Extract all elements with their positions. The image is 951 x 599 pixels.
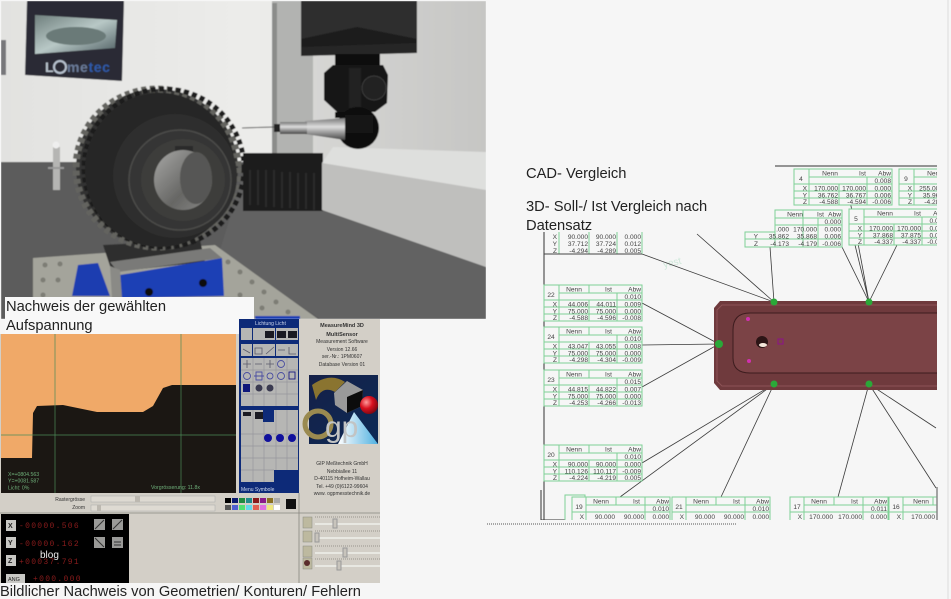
OGP logo: gp [325,411,358,444]
table 19: X [580,514,585,521]
table 21: 90.000 [695,514,715,521]
table 21: 0.000 [752,514,769,521]
table 5: 0.000 [929,226,946,232]
table 23: -4.266 [597,400,616,407]
radiator [243,153,323,211]
slider row: Zoom [72,505,85,511]
table 20: Abw [628,446,641,454]
table 24: 0.008 [624,344,641,350]
poster: L [45,59,54,75]
about text block: Database Version 01 [319,362,365,368]
table 23: -0.013 [622,400,641,407]
table 22: 75.000 [568,308,588,316]
table 19: Abw [656,498,669,506]
about text block: Version 12.66 [327,347,358,353]
table 20: Nenn [566,446,582,454]
table 19: Nenn [593,498,609,506]
table top middle [745,210,842,248]
table 5: 5 [854,216,858,223]
table 17: 170.000 [838,514,862,521]
table 22: Abw [628,286,641,294]
panel: photo of gear on measuring machine [1,1,486,319]
table 22: 75.000 [596,308,616,316]
table 20: 110.126 [565,468,588,476]
table 4: 36.767 [846,192,866,200]
table 20: X [553,462,558,468]
table 9: X [908,186,913,192]
table top middle: -4.173 [770,241,789,248]
table: top left partial: 0.012 [624,241,641,248]
table 24: Z [553,357,557,364]
table 23: 0.015 [624,379,641,386]
coordinate readout: ANG [8,577,20,583]
blue clamp fixture [72,240,300,319]
table top middle: Z [754,241,758,248]
tool palette [239,319,299,493]
table top middle: .000 [776,226,789,234]
table 5: -4.337 [902,239,921,246]
table 20: 90.000 [596,462,616,468]
table 22: Z [553,315,557,322]
table 23: 75.000 [568,394,588,400]
table 5: Nenn [877,210,893,218]
table 24: Ist [605,328,612,336]
caption: Aufspannung: Aufspannung [6,318,93,334]
table 21: Nenn [693,498,709,506]
caption: Aufspannung [5,297,254,334]
table top middle: 35.868 [797,234,817,240]
table: top left partial: Z [553,248,557,255]
table 23: -4.253 [569,400,588,407]
tool palette: Menu Symbole [241,487,275,493]
table 24: 43.055 [596,344,616,350]
table 9: Y [908,192,913,200]
slider row: Rastergrösse [55,497,85,503]
table 5 [849,209,947,246]
table 23: 0.007 [624,386,641,394]
table 19: 19 [575,504,583,511]
table 5: -4.337 [874,239,893,246]
panel: CAD comparison [541,166,951,533]
table 23: Nenn [566,372,582,378]
coordinate readout: -00000.162 [19,540,80,549]
table: top left partial: -4.289 [597,248,616,255]
about text block: Tel. +49 (0)6122-99604 [316,484,368,490]
table 5: X [858,226,863,232]
colour swatches [225,498,296,510]
table 21: X [680,514,685,521]
OGP logo [305,375,378,444]
table 24: 75.000 [596,350,616,358]
table 23: Y [553,394,558,400]
table 20: 110.117 [593,468,616,476]
table 24: Y [553,350,558,358]
slider row [55,496,215,511]
about text block: ser.-Nr.: 1PM0607 [322,354,362,360]
table 20: -0.009 [622,468,641,476]
table 4: Ist [859,170,866,178]
table 5: 0.006 [929,232,946,240]
table 24: -4.304 [597,357,616,364]
table 24: 24 [547,334,555,341]
text block: 3D comparison: 3D- Soll-/ Ist Vergleich nach [526,199,707,215]
about text block: MultiSensor [326,332,359,338]
table 24: Nenn [566,328,582,336]
table 22: 44.011 [596,302,616,308]
table 9: -4.283 [924,199,943,206]
about text block: GIP Meßtechnik GmbH [316,461,368,467]
table top middle: 35.862 [769,234,789,240]
table 20: Ist [605,446,612,454]
text block: 3D comparison [526,199,707,234]
table: top left partial: -4.294 [569,248,588,255]
table 22: -4.596 [597,315,616,322]
table 17: Nenn [811,498,827,506]
table 4: Nenn [822,170,838,178]
table top middle: 0.000 [824,219,841,226]
table 24: X [553,344,558,350]
calibration pin [48,142,64,190]
table 23: 75.000 [596,394,616,400]
camera view: Vorgrösserung: 11.8x [151,485,200,491]
table top middle: -0.006 [822,241,841,248]
table 5: Z [858,239,862,246]
table 20: Z [553,475,557,482]
table 22: Nenn [566,286,582,294]
camera view [1,334,236,493]
about text block: Nebbiallee 11 [327,469,357,475]
table 4: Z [803,199,807,206]
table 21: Ist [733,498,740,506]
table 21: Abw [756,498,769,506]
table 23: X [553,386,558,394]
coordinate readout [1,514,129,584]
camera view: Y=+0081.587 [8,478,39,484]
table 4: 0.006 [874,192,891,200]
caption: Aufspannung: Nachweis der gewählten [6,299,166,315]
table 20: -4.219 [597,475,616,482]
table 20: 0.000 [624,462,641,468]
table 4: -0.006 [872,199,891,206]
table 4: X [803,186,808,192]
table 19: Ist [633,498,640,506]
table 9: Z [908,199,912,206]
table 20 [544,445,642,482]
about text block: MeasureMind 3D [320,323,364,329]
table top middle: Nenn [787,212,803,218]
table 23: Ist [605,372,612,378]
table 16: X [897,514,902,521]
table 5: 170.000 [897,226,921,232]
table 20: 0.005 [624,475,641,482]
table 21: 0.010 [752,506,769,513]
text block: 3D comparison: Datensatz [526,218,592,234]
coordinate readout: Z [8,558,13,565]
table 23: Abw [628,372,641,378]
table: top left partial: 37.724 [596,241,616,248]
table 4: Y [803,192,808,200]
table 4 [794,169,892,206]
leader lines [620,190,936,497]
table 21: 90.000 [724,514,744,521]
table 4: 0.008 [874,178,891,185]
table top middle: Y [754,234,759,240]
watermark: yest [662,256,683,271]
table 4: 0.000 [874,186,891,192]
table 23: 0.000 [624,394,641,400]
table 23: 44.815 [568,386,588,394]
machine column [301,1,417,56]
table 5: -0.000 [927,239,946,246]
table 17 [790,496,888,520]
coordinate readout: blog [40,550,59,561]
table 17: Abw [874,498,887,506]
about text block [314,323,370,497]
table top middle: 170.000 [793,226,817,234]
table 21: 21 [675,504,683,511]
table: top left partial: 90.000 [568,234,588,241]
table 4: 36.762 [818,192,838,200]
table 17: X [798,514,803,521]
measuring probe head [242,54,388,149]
coordinate readout: Y [8,540,13,547]
table 9: 255.000 [919,186,943,192]
coordinate readout: X [8,523,13,530]
table: top left partial: Y [553,241,558,248]
table 4: 170.000 [814,186,838,192]
table: top left partial: 0.005 [624,248,641,255]
table 22: -4.588 [569,315,588,322]
table: top left partial: 90.000 [596,234,616,241]
table 24: -4.298 [569,357,588,364]
table 16: 170.000 [911,514,935,521]
table: top left partial [544,232,642,255]
table 24: 75.000 [568,350,588,358]
table 24 [544,327,642,364]
table 17: 170.000 [809,514,833,521]
table 24: 0.010 [624,336,641,343]
gear [76,89,244,247]
table 4: Abw [878,170,891,178]
table 16: Nenn [913,498,929,506]
table: top left partial: 0.000 [624,234,641,241]
table 23 [544,370,642,407]
table 22: 0.010 [624,294,641,301]
table 9: Nenn [927,170,943,178]
poster [25,1,124,81]
table 22: 0.000 [624,308,641,316]
about text block: D-40115 Hofheim-Wallau [314,476,370,482]
table 5: 170.000 [869,226,893,232]
white machine base [322,147,486,267]
about text block: www. ogpmesstechnik.de [314,491,370,497]
coordinate readout: +00037.791 [19,558,80,567]
table 19 [564,494,670,520]
light sliders [303,517,380,570]
table 22: Y [553,308,558,316]
about text block: Measurement Software [316,339,368,345]
table: top left partial: X [553,234,558,241]
table 17: 17 [793,504,801,511]
table 24: Abw [628,328,641,336]
table 23: 44.822 [596,386,616,394]
table 4: -4.588 [819,199,838,206]
table 5: 0.000 [929,218,946,225]
table 19: 90.000 [595,514,615,521]
table 22: X [553,302,558,308]
tool palette: Lichtung Licht [255,321,286,327]
table 9: 35.968 [923,192,943,200]
panel: software screenshot [0,319,380,584]
table 4: 4 [799,176,803,183]
table top middle: 0.006 [824,234,841,240]
table 21 [672,496,770,520]
table 23: Z [553,400,557,407]
coordinate readout: -00000.506 [19,522,80,531]
table 4: 170.000 [842,186,866,192]
table 17: Ist [851,498,858,506]
table 4: -4.594 [847,199,866,206]
table 22: 0.009 [624,302,641,308]
table 23: 23 [547,377,555,384]
CAD part [714,298,937,390]
table 19: 0.000 [652,514,669,521]
table 20: -4.224 [569,475,588,482]
table 20: 90.000 [568,462,588,468]
table 16 [888,496,936,520]
table 5: Abw [933,210,946,218]
table 17: 0.000 [870,514,887,521]
table 22 [544,285,642,322]
camera view: X=+0804.563 [8,472,39,478]
table top middle: -4.179 [798,241,817,248]
table 22: 22 [547,292,555,299]
table 5: Ist [914,210,921,218]
table top middle: Abw [828,212,841,218]
table 17: 0.011 [871,506,887,513]
table: top left partial: 37.712 [568,241,588,248]
table 20: 0.010 [624,454,641,461]
poster: metec [67,59,110,75]
table 24: 43.047 [568,344,588,350]
table top middle: 0.000 [824,226,841,234]
table 22: 44.006 [568,302,588,308]
table 20: 20 [547,452,555,459]
table 24: -0.009 [622,357,641,364]
table top middle: Ist [817,212,824,218]
table 22: -0.008 [622,315,641,322]
table 19: 90.000 [624,514,644,521]
table 5: 37.868 [873,232,893,240]
table 9 [898,168,937,206]
table 24: 0.000 [624,350,641,358]
heading: CAD comparison: CAD- Vergleich [526,166,626,182]
table 5: 37.875 [901,232,921,240]
table 20: Y [553,468,558,476]
camera view: Licht: 0% [8,486,30,492]
table 16: 16 [892,504,900,511]
table 22: Ist [605,286,612,294]
table 5: Y [858,232,863,240]
fixture plate [33,245,318,319]
table 9: 9 [904,176,908,183]
coordinate readout: +000.000 [33,575,82,584]
table 19: 0.010 [652,506,669,513]
